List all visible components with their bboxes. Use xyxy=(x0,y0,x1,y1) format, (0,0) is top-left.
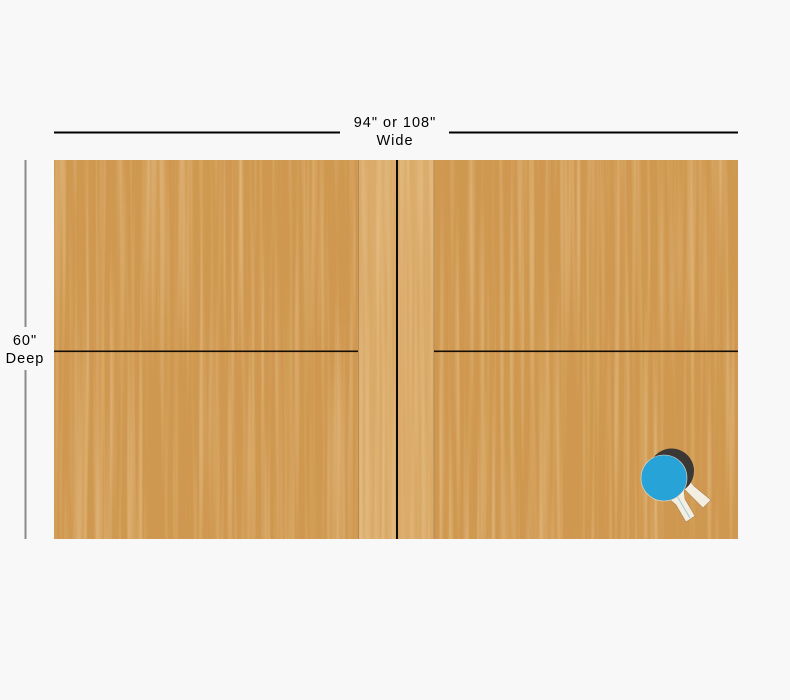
depth label: Deep xyxy=(6,351,44,367)
left horizontal line xyxy=(54,350,358,352)
right horizontal line xyxy=(434,350,738,352)
center leaf xyxy=(359,160,434,539)
table top xyxy=(54,160,738,539)
width label: 94" or 108" xyxy=(354,115,436,131)
back paddle head xyxy=(649,448,694,494)
depth label: 60" xyxy=(13,333,37,349)
width label: Wide xyxy=(376,133,414,149)
back paddle handle xyxy=(683,478,711,508)
front paddle head xyxy=(641,455,687,501)
icon: ping pong paddles xyxy=(641,448,711,522)
seams xyxy=(358,160,359,539)
center vertical line xyxy=(396,160,398,539)
front paddle handle xyxy=(668,490,695,522)
depth dimension xyxy=(6,160,44,539)
width dimension xyxy=(54,115,738,149)
